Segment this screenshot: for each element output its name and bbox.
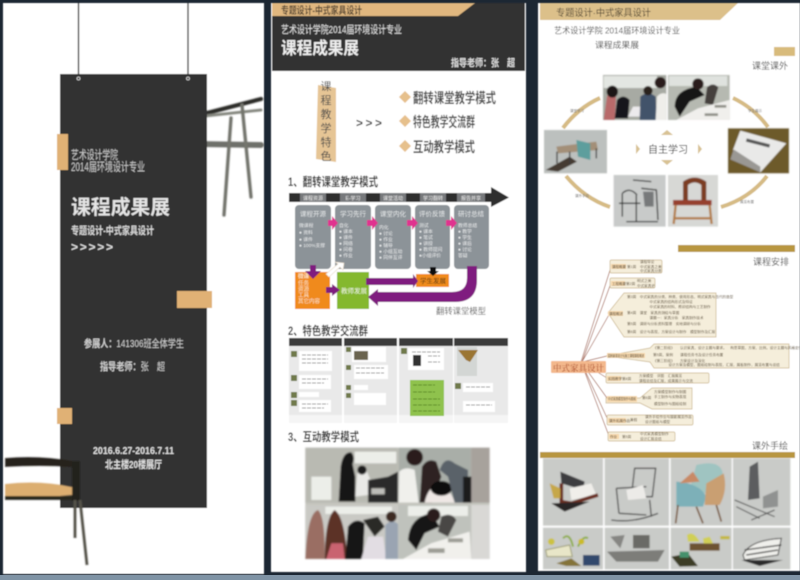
- pink arrows: [328, 216, 457, 230]
- mind map: 中式家具设计: [553, 362, 604, 373]
- small arc labels: 课外手绘: [575, 193, 589, 198]
- flipped classroom diagram: 教师发展: [341, 286, 368, 295]
- sketch: rocking chair: [611, 468, 658, 521]
- vertical course feature label: 学: [320, 121, 332, 135]
- heading: section 2: 2、特色教学交流群: [288, 323, 368, 338]
- flipped classroom diagram: 课堂活动: [383, 195, 403, 202]
- flipped classroom diagram: ● 笔试: [419, 234, 433, 241]
- flipped classroom diagram: ● 网络: [339, 240, 353, 247]
- date and venue: [93, 445, 174, 471]
- poster topic: 专题设计-中式家具设计: [71, 224, 154, 237]
- chevrons: >>>: [356, 116, 382, 130]
- flipped classroom diagram: 评价反馈: [419, 209, 446, 218]
- page title: 课程成果展: [281, 38, 359, 58]
- icon: chair bottom left: [5, 457, 87, 565]
- orange resource box: [295, 272, 330, 309]
- branch detail text: 设计图纸与模型: [645, 419, 671, 424]
- bottom-right figures: [408, 513, 440, 550]
- sketch: armchair: [550, 472, 598, 512]
- small arc labels: 课堂学习: [570, 108, 584, 113]
- flipped classroom diagram: 教师总结: [458, 222, 477, 229]
- mind map: 园林景观设计与施工课程课程概述: [608, 353, 644, 358]
- sketch: colored furniture: [671, 533, 730, 567]
- process cards: [295, 205, 489, 269]
- photo: chair sketch: [614, 175, 666, 227]
- vertical course feature label: 色: [320, 149, 332, 163]
- branch detail text: 暑假: [630, 417, 638, 422]
- advisor: 指导老师：张 超: [100, 360, 165, 373]
- sketch: blue sofa: [676, 463, 725, 523]
- branch detail text: 课外手绘作业与摄影展览作品: [645, 414, 692, 419]
- heading: extracurricular sketches: 课外手绘: [752, 440, 788, 451]
- flipped classroom diagram: ● 讨论: [379, 230, 393, 237]
- photo backgrounds: [305, 448, 398, 503]
- heading: section 1: 1、翻转课堂教学模式: [288, 174, 378, 189]
- flipped classroom diagram: ● 问卷: [339, 246, 353, 253]
- panel: left poster page: [3, 3, 264, 574]
- branch detail text: 第5周 调研与分析资料整理 实地调研与分析: [627, 321, 701, 326]
- flipped classroom diagram: 内化: [379, 224, 389, 231]
- flipped classroom diagram: ● 讲授: [419, 240, 433, 247]
- feature list: 特色教学交流群: [413, 114, 475, 130]
- mind map: [551, 259, 800, 441]
- feature list: 互动教学模式: [413, 139, 475, 155]
- flipped classroom diagram: 课程资源: [303, 195, 323, 202]
- green teacher box: [337, 272, 369, 309]
- branch detail text: 第5周，案例 课程任务书及设计任务布置: [653, 352, 724, 357]
- arrows: [305, 262, 477, 306]
- ring arcs: [563, 98, 768, 207]
- mind map: 中式家具模型制作与图纸: [608, 396, 636, 401]
- flipped classroom diagram: [289, 187, 509, 316]
- branch detail text: 明式之美: [637, 278, 652, 283]
- flipped classroom diagram: ● 作业: [339, 252, 353, 259]
- feature list: [399, 90, 496, 155]
- branch detail text: 《第二阶段》 认识家具，设计主题与要求。 构思草图，方案，比例。设计主题与风格定位: [653, 345, 800, 350]
- flipped classroom diagram: 任务: [298, 279, 310, 287]
- branch detail text: 手工制作与实物表现: [654, 394, 687, 399]
- flipped classroom diagram: ● 资料: [299, 229, 313, 236]
- flipped classroom diagram: 自化: [339, 222, 349, 229]
- flipped classroom diagram: 课堂内化: [380, 209, 406, 218]
- vertical course feature label: 教: [320, 108, 332, 121]
- vertical course feature label: 课: [320, 80, 332, 93]
- flipped classroom diagram: ● 讨论: [458, 246, 472, 253]
- self-directed learning diagram: [544, 75, 789, 227]
- branch detail text: 第4周 课堂 家具的测绘与草图: [627, 310, 680, 315]
- mind map: 实践教学: [608, 376, 622, 381]
- branch detail text: 第2周: [626, 281, 636, 286]
- diagram caption: 翻转课堂模型: [436, 306, 486, 316]
- flipped classroom diagram: 工具: [298, 292, 310, 299]
- small arc labels: 学生展示: [748, 108, 762, 113]
- flipped classroom diagram: ● 教学: [458, 228, 472, 235]
- poster subtitle: [71, 147, 145, 174]
- flipped classroom diagram: ● 作业: [379, 236, 393, 243]
- poster title: 课程成果展: [71, 195, 170, 219]
- sketch: building perspective: [735, 462, 778, 520]
- branch detail text: 中式家具模型制作: [640, 431, 669, 436]
- branch detail text: 课程导论: [640, 259, 655, 264]
- branch detail text: 中式家具史: [637, 283, 655, 288]
- flipped classroom diagram: ● 教师提问: [419, 246, 443, 253]
- branch detail text: 中式家具之美: [640, 264, 662, 269]
- flipped classroom diagram: 测试: [419, 222, 429, 229]
- center label: 自主学习: [648, 143, 688, 156]
- sketch gallery: [543, 458, 790, 569]
- branch detail text: 设计方案及模型，图纸绘制与表现，汇报，展板制作，展览布置与总结: [653, 362, 780, 367]
- vertical course feature label: 特: [320, 135, 332, 149]
- header band: [272, 3, 525, 71]
- flipped classroom diagram: ● 100%支撑: [299, 242, 325, 249]
- branch nodes: [606, 260, 789, 441]
- branch detail text: 第6周 设计与表现，方案设计与制作 模型制作及汇报: [627, 329, 716, 334]
- flipped classroom diagram: 学习先行: [340, 209, 366, 218]
- photos drawn in zoom coordinates: [544, 75, 789, 227]
- flipped classroom diagram: ● 学生: [458, 234, 472, 241]
- mind map: 作业: [610, 434, 618, 439]
- small arc labels: 展览布置: [740, 199, 754, 204]
- mind map: 课程概述: [609, 311, 623, 316]
- branch detail text: 中式家具的结构形式及特征: [627, 299, 693, 304]
- accent tabs: [57, 134, 212, 424]
- central node: [551, 361, 606, 373]
- ribbon text: 专题设计-中式家具设计: [281, 4, 362, 17]
- date and venue: 北主楼20楼展厅: [105, 458, 162, 471]
- section bar: [540, 452, 795, 458]
- branch labels: [607, 264, 645, 439]
- date and venue: 2016.6.27-2016.7.11: [93, 445, 174, 457]
- windows: [311, 452, 468, 516]
- chat screenshots: [289, 338, 508, 423]
- branch detail text: 课程总结及汇报，成果展示与交流: [639, 378, 693, 383]
- timeline arrow: [289, 187, 509, 207]
- flipped classroom diagram: ● 课本: [419, 228, 433, 235]
- branch detail text: [622, 259, 800, 441]
- page subtitle: 课程成果展: [595, 39, 639, 50]
- flipped classroom diagram: E-学习: [345, 195, 361, 202]
- icon: chair top right: [196, 99, 261, 215]
- connector lines: [581, 267, 611, 436]
- branch detail text: 设计汇报总结: [640, 436, 662, 441]
- header ribbon: [272, 3, 475, 16]
- photo: ming armchair: [668, 175, 718, 227]
- department text: 艺术设计学院2014届环境设计专业: [281, 23, 402, 36]
- tag bar: [774, 47, 795, 56]
- flipped classroom diagram: ● 小组互动: [379, 248, 403, 255]
- branch detail text: 第5周: [622, 434, 632, 439]
- flipped classroom diagram: ● 课本: [339, 228, 353, 235]
- photo: teacher top right: [668, 75, 730, 120]
- flipped classroom diagram: ●小组评价: [419, 252, 441, 259]
- flipped classroom diagram: 报告并享: [461, 195, 481, 202]
- sketch: still life with plants: [546, 536, 600, 566]
- chat placeholder lines: [302, 352, 492, 408]
- heading: course schedule: 课程安排: [753, 256, 789, 267]
- ribbon text: 专题设计·中式家具设计: [556, 7, 651, 19]
- flipped classroom diagram: ● 课件: [339, 234, 353, 241]
- interactive teaching photo collage: [305, 448, 490, 559]
- photo: booklets right: [728, 128, 789, 173]
- flipped classroom diagram: 研讨总结: [458, 209, 484, 218]
- mind map: 工程概要: [612, 281, 626, 286]
- advisor line: 指导老师：张 超: [451, 56, 515, 70]
- flipped classroom diagram: 课程开源: [300, 209, 326, 218]
- flipped classroom diagram: ● 课件: [299, 236, 313, 243]
- panel: right course page: [538, 3, 800, 571]
- participants: 参展人：141306班全体学生: [84, 337, 184, 350]
- section bar: [678, 245, 795, 252]
- bottom-left figures: [305, 510, 325, 559]
- branch detail text: 方案模型 评图 汇报展览: [639, 373, 683, 378]
- hanging strings: [78, 3, 188, 78]
- branch detail text: 课题一：家具分析 家具制作技术: [627, 315, 704, 320]
- heading: in and out of class: 课堂课外: [752, 60, 788, 71]
- vertical course feature label: [316, 80, 336, 163]
- chevrons: >>>>>: [71, 240, 113, 254]
- poster board: [60, 74, 207, 508]
- flipped classroom diagram: 学生发展: [420, 276, 446, 285]
- mind map: 课外拓展作品: [609, 418, 630, 423]
- branch detail text: 第6周: [642, 395, 652, 400]
- branch detail text: 《第三阶段》 方案设计及深化: [653, 358, 706, 363]
- header ribbon: [540, 3, 738, 20]
- heading: section 3: 3、互动教学模式: [288, 429, 359, 444]
- branch detail text: 第3周 中式家具的分类、种类、使用形态，明式家具与当代的造型: [627, 294, 734, 299]
- feature list: 翻转课堂教学模式: [413, 90, 496, 106]
- poster subtitle: 2014届环境设计专业: [71, 159, 145, 174]
- branch detail text: 模型制作与图纸绘制: [654, 401, 687, 406]
- flipped classroom diagram: 答疑: [458, 252, 468, 259]
- flipped classroom diagram: ● 课后: [458, 240, 472, 247]
- vertical course feature label: 程: [320, 94, 332, 107]
- branch detail text: 中式家具分类: [640, 268, 662, 273]
- sketch: pencil interior: [607, 535, 665, 562]
- flipped classroom diagram: ● 同伴互评: [379, 254, 403, 261]
- branch detail text: 方案模型制作与制图: [654, 389, 687, 394]
- panel: middle course page: [271, 3, 526, 572]
- flipped classroom diagram: ● 辅导: [379, 242, 393, 249]
- mind map: 课程概要: [612, 264, 626, 269]
- branch detail text: 第1周: [627, 264, 637, 269]
- poster subtitle: 艺术设计学院: [71, 147, 118, 162]
- top-left figures: [339, 452, 355, 502]
- flipped classroom diagram: 资源: [298, 285, 310, 293]
- photo: model left: [544, 130, 607, 173]
- flipped classroom diagram: 其它内容: [298, 297, 321, 305]
- branch detail text: 第8周: [622, 376, 632, 381]
- flipped classroom diagram: 学习翻转: [423, 195, 443, 202]
- top-right figures: [399, 468, 419, 503]
- flipped classroom diagram: 微课程: [299, 222, 314, 229]
- department text: 艺术设计学院 2014届环境设计专业: [554, 26, 680, 36]
- photo: students top left: [603, 75, 666, 120]
- student development box: [416, 274, 449, 287]
- flipped classroom diagram: 微课: [298, 272, 310, 280]
- small arc labels: [570, 108, 762, 204]
- sketch: curved building: [741, 538, 783, 566]
- branch detail text: 中式家具的材料、榫卯结构与工艺制作: [627, 304, 711, 309]
